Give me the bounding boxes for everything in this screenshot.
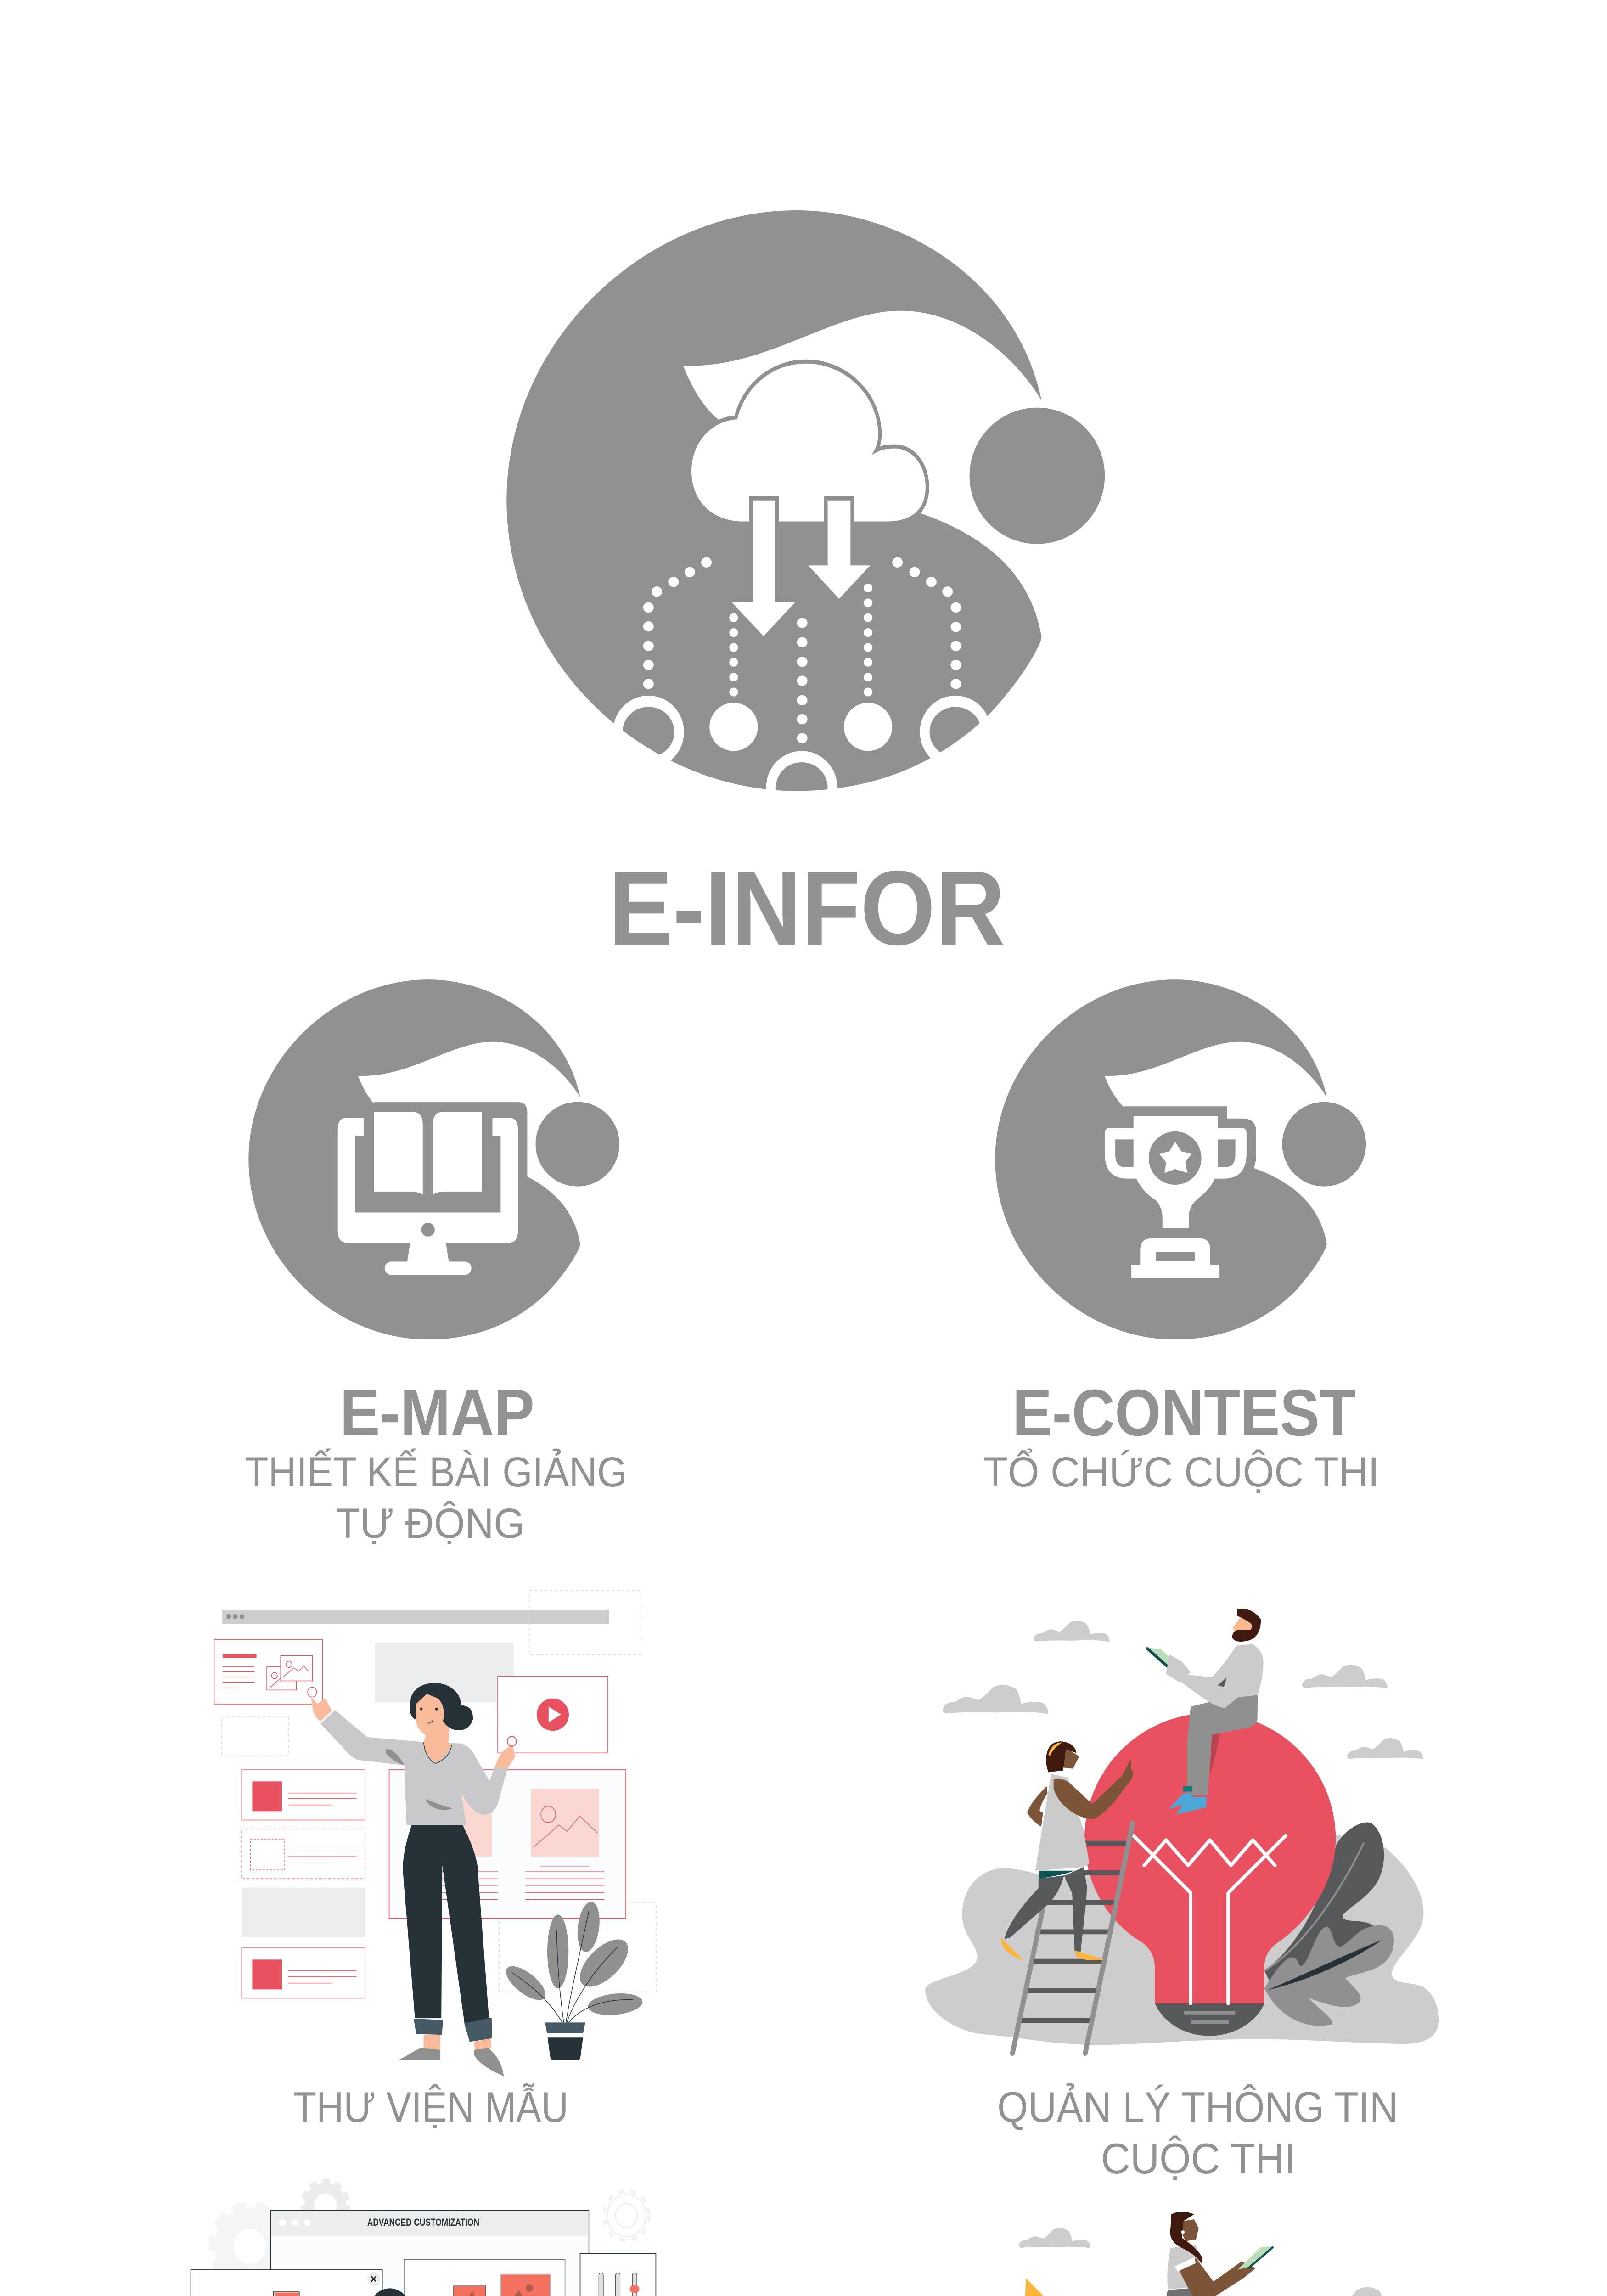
image sizes panel	[404, 2259, 565, 2296]
sliders panel	[580, 2254, 656, 2296]
woman pointing	[311, 1683, 516, 2076]
illustration: light bulb	[925, 1609, 1439, 2054]
dashed placeholders	[222, 1591, 656, 1992]
touch ring	[507, 1736, 517, 1746]
subheading: E-CONTEST: TỔ CHỨC CUỘC THI	[983, 1448, 1379, 1496]
woman on ladder	[1001, 1741, 1133, 1960]
clouds	[943, 1621, 1423, 1759]
red text-image panel	[214, 1639, 322, 1704]
colour palette panel	[191, 2270, 382, 2296]
illustration: target	[954, 2212, 1439, 2296]
arrow	[986, 2278, 1163, 2296]
icon: dotted connections	[643, 557, 961, 743]
browser bar	[222, 1610, 609, 1624]
seated woman	[1164, 2212, 1273, 2296]
main window	[270, 2211, 589, 2296]
man sitting on bulb	[1146, 1609, 1264, 1814]
bulb base	[1155, 2003, 1264, 2036]
background gears	[213, 2181, 649, 2296]
video panel	[498, 1677, 608, 1753]
icon: cloud	[690, 361, 927, 523]
logo body	[506, 210, 1041, 791]
leaves	[1264, 1822, 1394, 2026]
heading: E-MAP: E-MAP	[340, 1376, 534, 1450]
window title: ADVANCED CUSTOMIZATION	[367, 2217, 479, 2228]
logo: E-MAP body	[248, 979, 619, 1339]
icon: monitor with open book	[336, 1102, 527, 1275]
icon: download arrows	[732, 496, 870, 636]
woman from behind	[331, 2288, 462, 2296]
filament	[1133, 1835, 1286, 2003]
clouds	[1019, 2228, 1432, 2296]
logo: E-CONTEST body	[995, 979, 1366, 1339]
illustration: effects library	[191, 2181, 656, 2296]
gray panel	[375, 1643, 514, 1702]
heading: E-CONTEST: E-CONTEST	[1012, 1376, 1356, 1450]
icon: network nodes	[618, 701, 986, 818]
logo: E-INFOR cloud network	[506, 210, 1105, 818]
caption: THƯ VIỆN MẪU: THƯ VIỆN MẪU	[293, 2083, 568, 2131]
icon: trophy	[1093, 1106, 1266, 1278]
subheading: E-MAP line 2: TỰ ĐỘNG	[336, 1500, 525, 1547]
list cards	[242, 1770, 365, 1998]
bulb	[1084, 1713, 1336, 2003]
background blob	[925, 1835, 1439, 2045]
caption: QUẢN LÝ THÔNG TIN: QUẢN LÝ THÔNG TIN	[997, 2083, 1398, 2131]
logo dot	[970, 408, 1105, 544]
title: E-INFOR: E-INFOR	[608, 849, 1005, 967]
plant	[501, 1900, 643, 2060]
subheading: E-MAP line 1: THIẾT KẾ BÀI GIẢNG	[245, 1448, 627, 1496]
ladder	[1012, 1823, 1133, 2054]
illustration: template library	[214, 1591, 656, 2076]
article panel	[389, 1770, 626, 1918]
caption: CUỘC THI: CUỘC THI	[1101, 2134, 1296, 2183]
